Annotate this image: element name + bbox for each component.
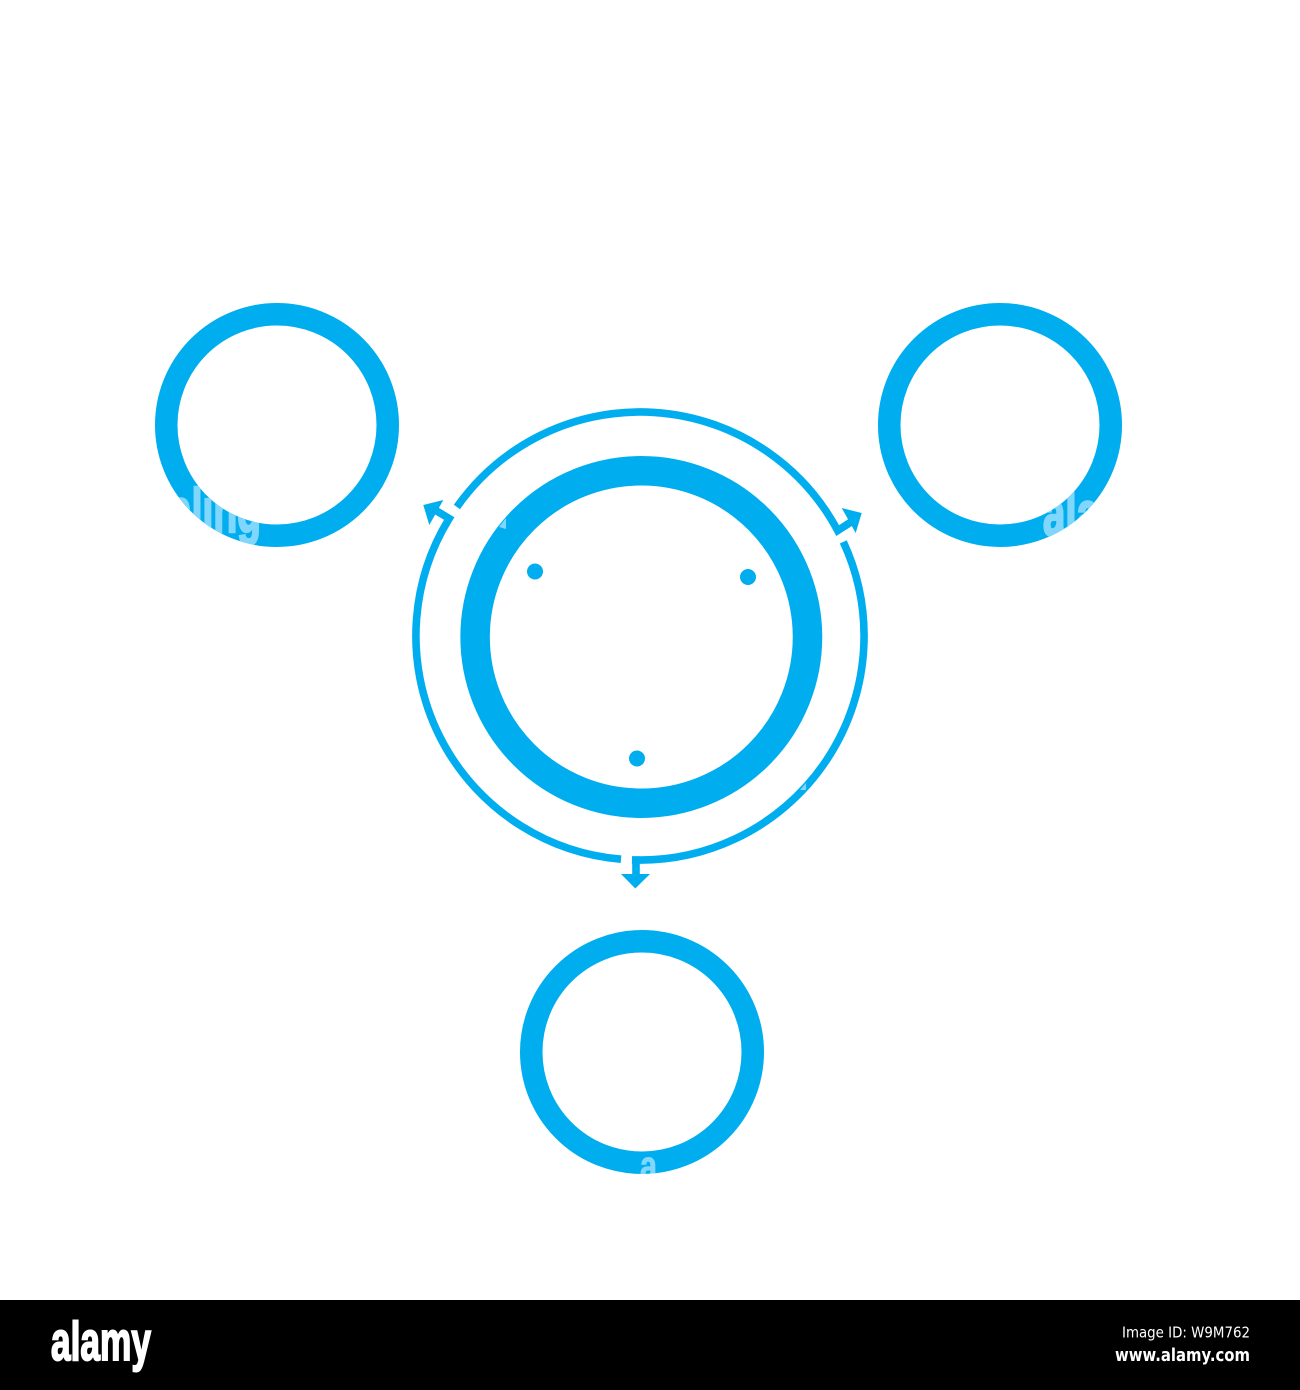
watermark fragment: bottom ring: a — [640, 1142, 657, 1189]
left outcome ring — [166, 314, 388, 546]
watermark fragment: right ring: ala — [1043, 480, 1099, 549]
arrow: left arc to left ring — [416, 500, 621, 859]
footer logo: alamy — [51, 1310, 151, 1372]
bottom outcome ring — [531, 941, 753, 1189]
dot: upper left — [527, 564, 543, 580]
footer bar — [0, 1300, 1300, 1390]
website: www.alamy.com — [1115, 1345, 1250, 1366]
image id: Image ID: W9M762 — [1122, 1324, 1250, 1342]
dot: bottom — [629, 750, 645, 766]
watermark fragment: left ring: aling — [170, 477, 261, 546]
arrow: top arc to right ring — [457, 412, 862, 533]
arrow: right arc to bottom ring — [621, 542, 864, 888]
infographic canvas — [0, 303, 1300, 1390]
central ring — [475, 471, 808, 803]
dot: upper right — [740, 569, 756, 585]
right outcome ring — [889, 314, 1111, 549]
